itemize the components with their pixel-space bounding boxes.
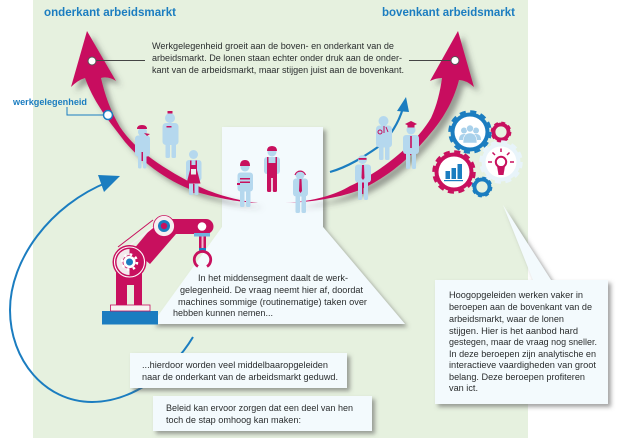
heading: bovenkant: bovenkant arbeidsmarkt [382,5,515,19]
figure: nurse [162,111,178,158]
callout: hoogopgeleiden: arbeidsmarkt, waar de lonen [449,314,564,325]
callout: beleid: toch de stap omhoog kan maken: [166,415,301,426]
figure: helmet worker [237,160,253,207]
blue curved arrow [10,175,193,402]
callout: beleid [153,396,372,431]
middensegment text: hebben kunnen nemen... [173,308,273,319]
label: werkgelegenheid: werkgelegenheid [12,97,87,107]
robot arm [102,216,214,324]
callout: hoogopgeleiden: gestegen, maar de vraag nog sneller. [449,337,597,348]
robot elbow [154,216,174,236]
robot outer arm lines [118,220,153,247]
figure: doctor [376,116,392,160]
callout: hoogopgeleiden: interactieve vaardigheden van groot [449,360,596,371]
small blue arrow [330,97,409,172]
intro text: Werkgelegenheid groeit aan de boven- en onderkant van de [152,41,394,52]
callout: hoogopgeleiden [435,205,608,404]
callout: hierdoor: ...hierdoor worden veel middelbaaropgeleiden [142,360,328,371]
middensegment text: In het middensegment daalt de werk- [198,273,348,284]
figure: apron [186,150,202,195]
connector left top [88,57,145,65]
figure: manager with glasses [355,155,371,200]
callout: beleid: Beleid kan ervoor zorgen dat een deel van hen [166,403,353,414]
panel: middensegment [152,127,405,324]
label: werkgelegenheid [12,97,113,120]
middensegment text: machines sommige (routinematige) taken over [178,297,368,308]
figure: overalls worker [264,146,280,192]
callout: hoogopgeleiden: beroepen aan de bovenkant van de [449,302,592,313]
figure: call-centre agent [293,170,308,213]
robot arm highlight [123,224,157,251]
callout: hoogopgeleiden: Hoogopgeleiden werken vaker in [449,290,583,301]
intro text [152,41,404,76]
icon: small pink gear [492,122,510,142]
callout: hierdoor [130,353,347,388]
heading: onderkant: onderkant arbeidsmarkt [44,5,176,19]
connector right top [409,56,459,64]
icon: light gear with bulb [480,142,522,182]
intro text: arbeidsmarkt. De lonen staan echter onder druk aan de onder- [152,53,402,64]
icon: small blue gear [472,178,492,196]
callout: hoogopgeleiden: stijgen. Hier is het aanbod hard [449,326,578,337]
icon: blue gear with people [450,112,490,152]
right curved arrow [285,31,474,203]
callout: hoogopgeleiden: van ict. [449,383,478,394]
robot body [116,270,142,305]
intro text: kant van de arbeidsmarkt, maar stijgen juist aan de bovenkant. [152,65,404,76]
middensegment text [173,273,368,319]
callout: hierdoor: naar de onderkant van de arbeidsmarkt geduwd. [142,372,338,383]
robot base plate [110,305,150,311]
robot base [102,311,158,324]
left curved arrow [71,31,258,203]
robot forearm [133,220,176,264]
icon: pink gear with bar chart [434,152,474,192]
figure: worker with cap [135,125,150,168]
callout: hoogopgeleiden: belang. Deze beroepen profiteren [449,372,585,383]
callout: hoogopgeleiden: In deze beroepen zijn analytische en [449,349,596,360]
figure: graduate [403,121,419,169]
middensegment text: gelegenheid. De vraag neemt hier af, doordat [180,285,363,296]
background panel [33,0,528,438]
robot gripper [194,233,211,266]
robot upper arm [165,219,214,234]
robot joint [112,245,146,279]
